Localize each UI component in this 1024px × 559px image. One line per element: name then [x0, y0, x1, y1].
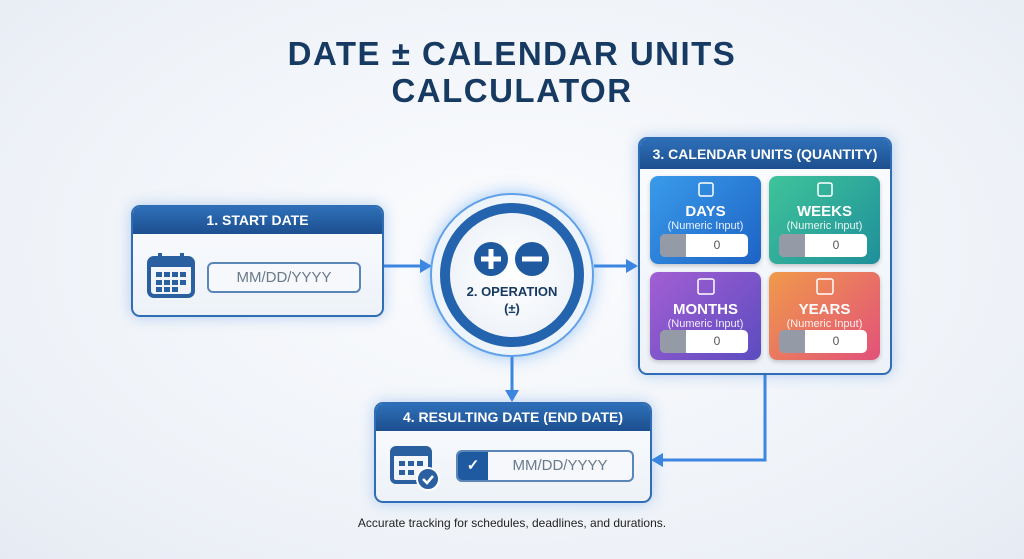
operation circle	[420, 183, 604, 367]
tile: days: DAYS	[685, 203, 726, 220]
input	[207, 262, 361, 293]
panel: resulting date	[374, 402, 652, 503]
tile: weeks: 0	[833, 238, 839, 252]
title: CALCULATOR	[391, 72, 633, 109]
tile: months: (Numeric Input)	[668, 318, 743, 330]
panel: calendar units: 3. CALENDAR UNITS (QUANTITY)	[653, 146, 877, 162]
input with check	[456, 450, 634, 482]
input: MM/DD/YYYY	[236, 269, 332, 286]
tile: weeks: WEEKS	[797, 203, 852, 220]
input with check: MM/DD/YYYY	[512, 457, 608, 474]
operation circle: (±)	[504, 301, 520, 316]
icon: plus minus	[474, 242, 549, 276]
icon: calendar	[147, 253, 195, 298]
tile: weeks: (Numeric Input)	[787, 220, 862, 232]
tile: days: 0	[714, 238, 720, 252]
caption: Accurate tracking for schedules, deadlines, and durations.	[358, 516, 666, 530]
tile: months: 0	[714, 334, 720, 348]
tile: days	[650, 176, 761, 264]
title	[288, 35, 736, 109]
tile: years: YEARS	[799, 301, 850, 318]
input with check: ✓	[467, 457, 479, 474]
operation circle: 2. OPERATION	[467, 284, 557, 299]
tile: months	[650, 272, 761, 360]
tile: years: (Numeric Input)	[787, 318, 862, 330]
panel: start date	[131, 205, 384, 317]
panel: resulting date: 4. RESULTING DATE (END DATE)	[403, 409, 623, 425]
tile: weeks	[769, 176, 880, 264]
panel: start date: 1. START DATE	[206, 212, 309, 228]
tile: days: (Numeric Input)	[668, 220, 743, 232]
panel: calendar units	[638, 137, 892, 375]
tile: months: MONTHS	[673, 301, 738, 318]
tile: years: 0	[833, 334, 839, 348]
icon: calendar check	[390, 446, 440, 491]
tile: years	[769, 272, 880, 360]
title: DATE ± CALENDAR UNITS	[288, 35, 736, 72]
